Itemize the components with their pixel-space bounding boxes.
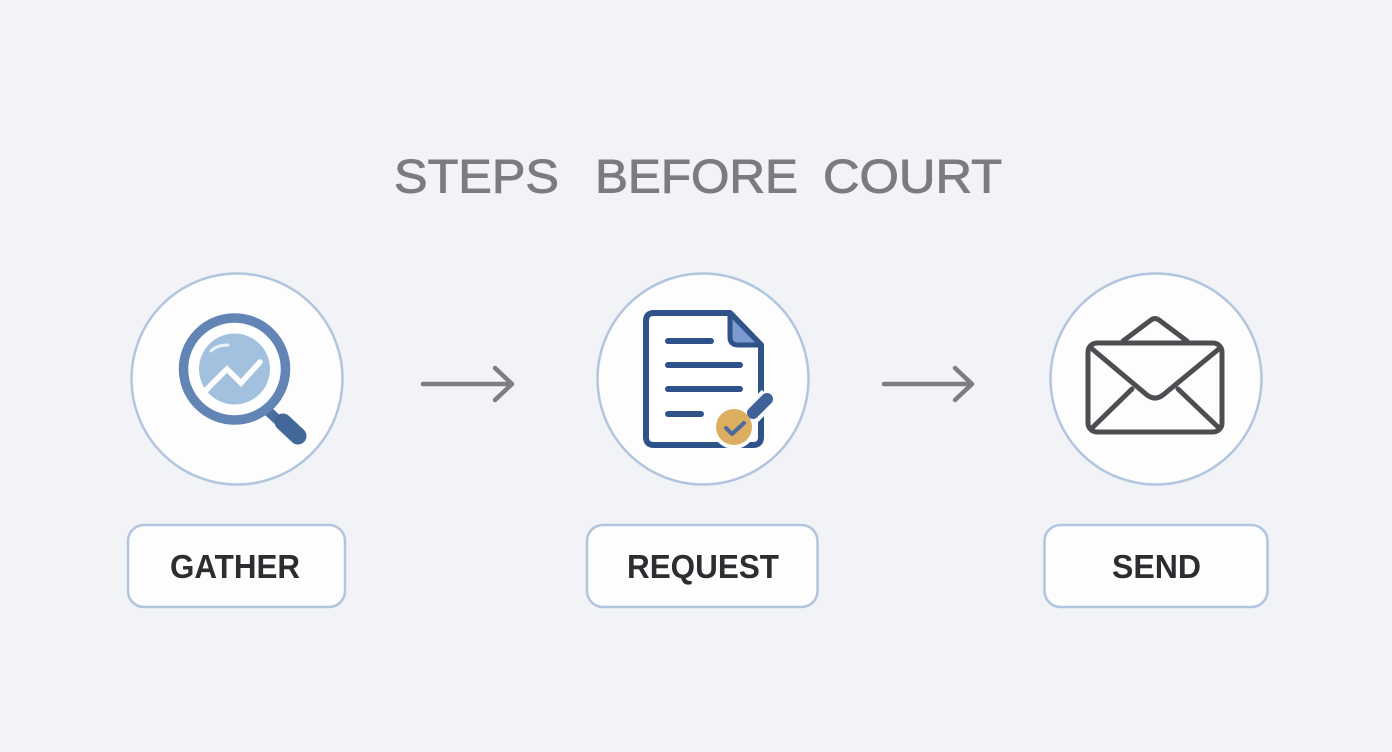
title [394,150,1002,202]
title: BEFORE [595,150,798,202]
label: gather [128,525,345,607]
arrow: gather to request [423,368,512,400]
step: request [598,274,808,484]
label: gather: GATHER [170,548,300,585]
label: request: REQUEST [627,548,779,585]
icon: open envelope [1088,318,1222,432]
label: request [587,525,818,607]
label: send: SEND [1112,548,1201,585]
title: STEPS [394,150,559,202]
title: COURT [823,150,1002,202]
icon circle: gather [132,274,342,484]
step: gather [132,274,342,484]
icon circle: request [598,274,808,484]
icon circle: send [1050,274,1262,484]
label: send [1044,525,1268,607]
icon: magnifying glass with trend line [184,318,298,436]
icon: document with approval badge [646,313,769,449]
step: send [1050,274,1262,484]
arrow: request to send [884,368,972,400]
